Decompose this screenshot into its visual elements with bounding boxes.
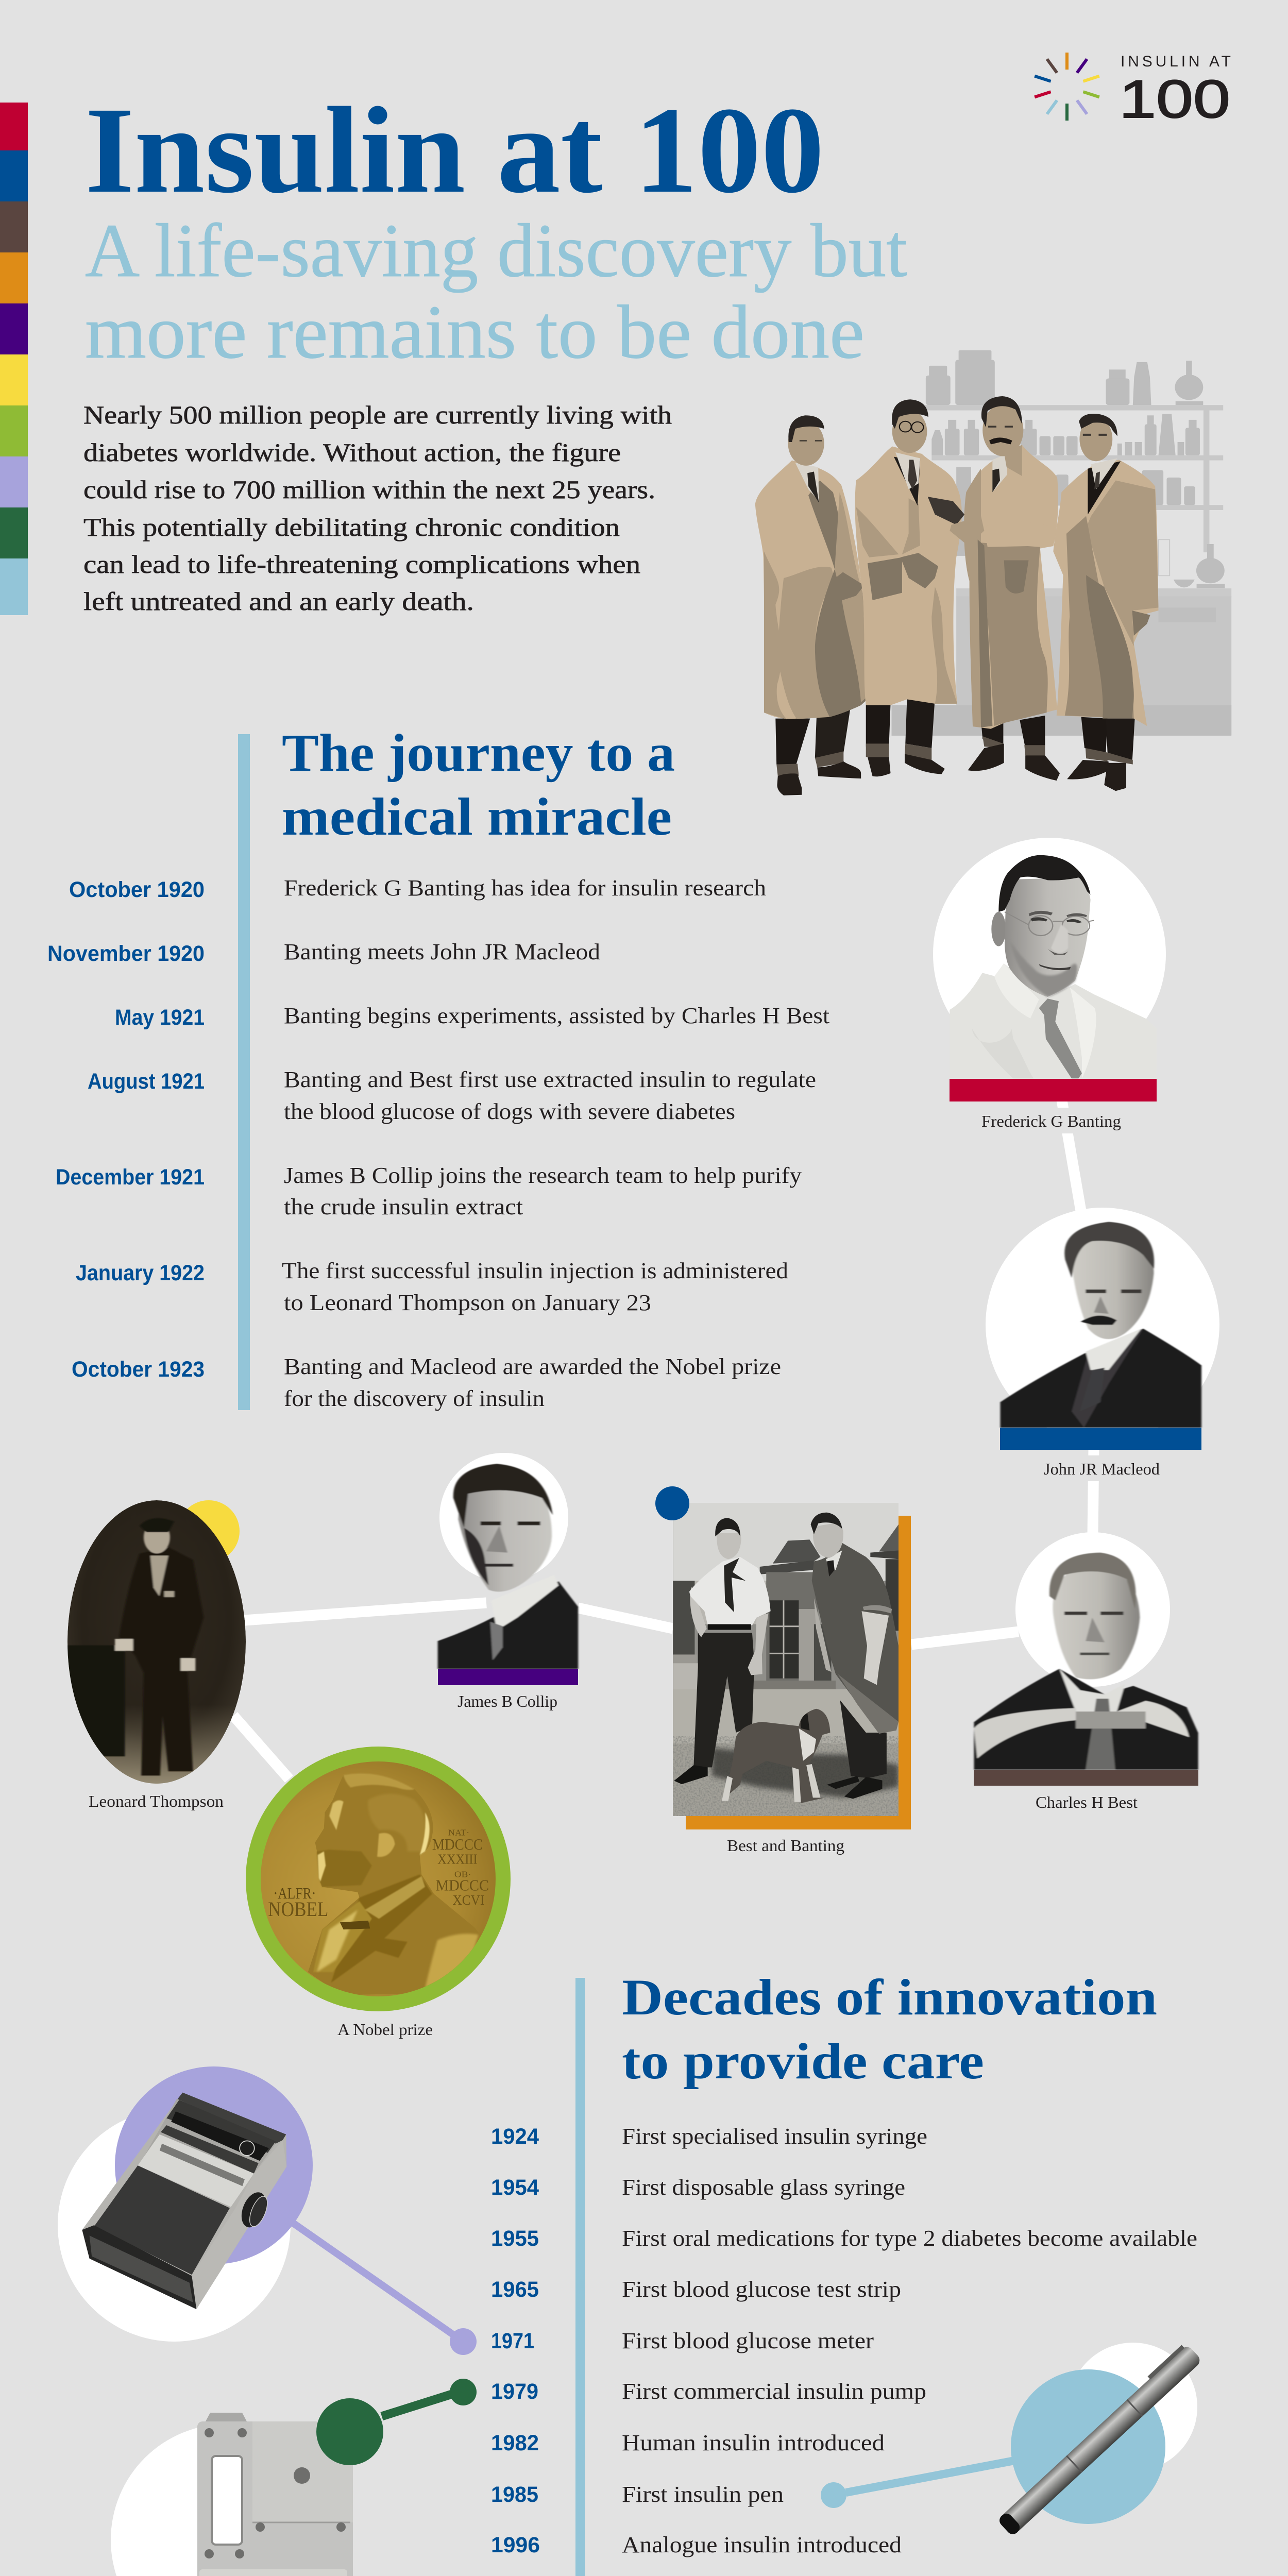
ground (673, 1663, 725, 1691)
events: the crude insulin extract (284, 1194, 523, 1219)
man 3 (928, 396, 1060, 781)
years: 1924 (491, 2124, 539, 2149)
man 4 (1053, 414, 1159, 791)
logo: Insulin at 100 top (1035, 53, 1231, 129)
portrait: James B Collip (438, 1453, 578, 1710)
logo: Insulin at 100 top: INSULIN AT (1121, 53, 1231, 70)
portrait: John JR Macleod (986, 1208, 1219, 1481)
years: 1979 (491, 2379, 538, 2404)
caption: Charles H Best (1036, 1793, 1138, 1811)
heading: to provide care (622, 2032, 984, 2090)
events: The first successful insulin injection is administered (282, 1258, 788, 1283)
logo: Insulin at 100 top: 100 (1119, 70, 1230, 129)
subtitle: more remains to be done (85, 290, 865, 375)
portrait: Charles H Best (974, 1532, 1198, 1811)
section: decades of innovation timeline (491, 1969, 1197, 2576)
medal: a Nobel prize: OB· (454, 1869, 471, 1879)
heading (282, 723, 675, 846)
years: 1982 (491, 2431, 539, 2455)
caption: Leonard Thompson (89, 1792, 224, 1810)
medal: a Nobel prize (246, 1747, 511, 2039)
medal: a Nobel prize: ·ALFR· (274, 1884, 316, 1902)
events: James B Collip joins the research team to help purify (284, 1163, 802, 1188)
medal: a Nobel prize: MDCCC (436, 1876, 489, 1894)
device: insulin pen (821, 2343, 1202, 2537)
years: 1971 (491, 2329, 534, 2353)
dates: August 1921 (88, 1069, 205, 1094)
man 2 (855, 399, 962, 776)
events: First disposable glass syringe (622, 2175, 905, 2200)
events: to Leonard Thompson on January 23 (284, 1290, 651, 1315)
title: Insulin at 100 (85, 81, 824, 218)
subtitle: A life-saving discovery but (85, 209, 907, 293)
dog (725, 1709, 830, 1803)
device: insulin pump (111, 2379, 477, 2576)
caption (974, 1108, 1128, 1133)
man 1 (755, 415, 870, 795)
events: First oral medications for type 2 diabetes become available (622, 2226, 1197, 2251)
intro text block: can lead to life-threatening complications when (83, 550, 640, 579)
photo backdrop (671, 1501, 901, 1819)
events (622, 2124, 1197, 2576)
dates: January 1922 (76, 1261, 205, 1285)
building walls and windows (766, 1572, 818, 1687)
events: Banting and Macleod are awarded the Nobel prize (284, 1354, 781, 1379)
roofs (773, 1539, 821, 1564)
colour bar (974, 1770, 1198, 1786)
events (282, 875, 829, 1411)
caption: Frederick G Banting (981, 1112, 1121, 1130)
right man (840, 1700, 887, 1778)
events: First blood glucose test strip (622, 2277, 901, 2302)
caption: James B Collip (457, 1692, 557, 1710)
left man (693, 1633, 754, 1767)
events: Human insulin introduced (622, 2430, 885, 2455)
dates: November 1920 (47, 941, 205, 966)
vertical bar (238, 734, 250, 1410)
portrait: Frederick G Banting (933, 838, 1166, 1133)
yellow dot (178, 1500, 240, 1562)
years: 1965 (491, 2277, 539, 2302)
intro text block: diabetes worldwide. Without action, the figure (83, 438, 621, 467)
colour strip (0, 103, 28, 615)
colour bar (438, 1669, 578, 1685)
illustration: scientists in laboratory (755, 350, 1231, 795)
years: 1985 (491, 2482, 538, 2507)
blue dot (655, 1486, 689, 1520)
connector lines between people (233, 1097, 1094, 1779)
medal: a Nobel prize: XCVI (452, 1892, 484, 1908)
caption: A Nobel prize (337, 2020, 433, 2039)
dates: October 1920 (69, 877, 205, 902)
events: Analogue insulin introduced (622, 2532, 902, 2557)
caption (1036, 1455, 1170, 1481)
device: blood glucose meter (58, 2066, 477, 2355)
years (491, 2124, 548, 2576)
orange offset panel (686, 1516, 911, 1829)
laboratory shelves and bottles (891, 350, 1231, 736)
intro text block: could rise to 700 million within the next 25 years. (83, 475, 655, 504)
events: First insulin pen (622, 2482, 784, 2507)
section: journey timeline (47, 723, 829, 1411)
medal: a Nobel prize: NOBEL (268, 1897, 328, 1921)
sky (673, 1503, 899, 1581)
subtitle (85, 209, 907, 375)
heading: medical miracle (282, 787, 672, 846)
events: Banting meets John JR Macleod (284, 939, 600, 964)
vertical bar (575, 1978, 585, 2576)
heading (622, 1969, 1157, 2090)
years: 1955 (491, 2226, 539, 2251)
heading: Decades of innovation (622, 1969, 1157, 2026)
events: Frederick G Banting has idea for insulin research (284, 875, 766, 901)
intro text block: This potentially debilitating chronic condition (83, 513, 620, 541)
events: Banting and Best first use extracted insulin to regulate (284, 1067, 816, 1092)
dates (47, 877, 205, 1382)
dates: May 1921 (115, 1005, 205, 1030)
dates: December 1921 (56, 1165, 205, 1190)
intro text block: left untreated and an early death. (83, 587, 474, 616)
portrait: Leonard Thompson (67, 1500, 246, 1810)
intro text block (83, 400, 672, 616)
medal: a Nobel prize: NAT· (448, 1828, 469, 1838)
intro text block: Nearly 500 million people are currently living with (83, 400, 672, 429)
years: 1954 (491, 2175, 539, 2200)
medal: a Nobel prize: MDCCC (432, 1835, 483, 1853)
events: Banting begins experiments, assisted by Charles H Best (284, 1003, 829, 1028)
events: First specialised insulin syringe (622, 2124, 927, 2149)
events: First blood glucose meter (622, 2328, 874, 2353)
events: First commercial insulin pump (622, 2379, 926, 2404)
events: for the discovery of insulin (284, 1386, 545, 1411)
caption: Best and Banting (727, 1836, 844, 1855)
photo: Best and Banting (655, 1486, 911, 1855)
heading: The journey to a (282, 723, 675, 783)
dates: October 1923 (72, 1357, 205, 1382)
colour bar (1000, 1428, 1201, 1450)
years: 1996 (491, 2533, 540, 2557)
colour bar (950, 1079, 1157, 1101)
caption: John JR Macleod (1044, 1460, 1160, 1478)
events: the blood glucose of dogs with severe diabetes (284, 1099, 735, 1124)
medal: a Nobel prize: XXXIII (437, 1851, 478, 1867)
